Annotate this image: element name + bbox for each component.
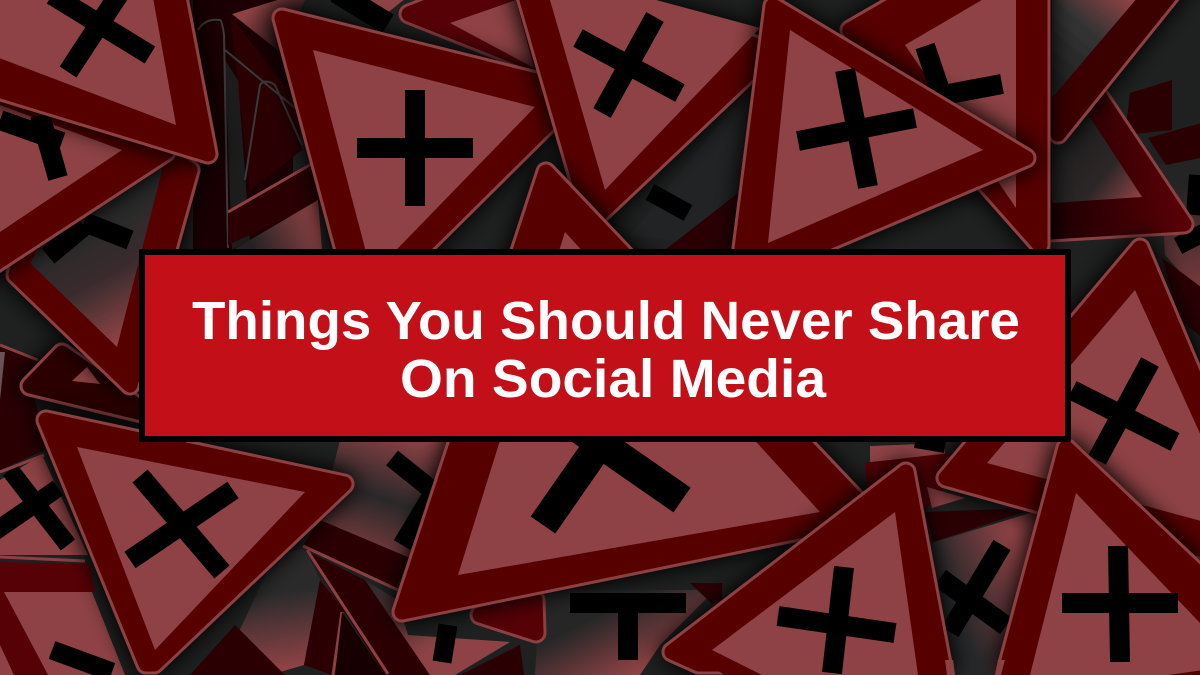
sign: diagonal band lower centre [305, 550, 524, 675]
sign: lower left corner [30, 353, 150, 415]
sign: bottom centre right grey with cross [925, 508, 1040, 675]
sign: top right down pointing [1040, 0, 1190, 134]
sign: bottom left lower with cross [0, 557, 125, 675]
sign: large top right with plus [738, 6, 1026, 280]
strip above bottom sign [865, 442, 965, 520]
sign: bottom centre back with cross [535, 583, 722, 675]
sign: centre apex behind banner and big lower sign [402, 172, 872, 612]
title banner [139, 249, 1071, 442]
far left dark sign [0, 345, 45, 472]
grey sign under third sign [630, 85, 750, 250]
title text: Things You Should Never Share [192, 291, 1020, 351]
sign: lower middle grey with cross [320, 440, 450, 560]
dark strip between top signs [193, 0, 302, 250]
sign: bottom left upper with cross [0, 455, 88, 555]
sign: top strip inner with cross [232, 0, 410, 52]
sign: right with cross behind big sign [850, 0, 1040, 245]
sign: triangle right behind band [1045, 15, 1184, 232]
sign: band behind second sign [228, 158, 330, 250]
sign: bottom centre right with plus [672, 472, 955, 675]
sign: far right grey with bars [1148, 122, 1200, 340]
sign: lower left grey with band [190, 548, 344, 675]
sign: top second with plus [282, 18, 580, 310]
sign: top left with cross [0, 0, 208, 154]
sign: top third with cross [517, 0, 772, 222]
sign: bottom left front with cross [46, 420, 344, 664]
sign: top middle small sign [409, 0, 540, 68]
sign: bottom right with plus [995, 448, 1200, 675]
sign: mid right with cross [946, 248, 1200, 570]
sign: left bottom pointing with cross [16, 90, 190, 385]
band below lower middle [303, 520, 410, 590]
sign: top right small dark sign [1125, 80, 1172, 135]
sign: small corner under big sign [480, 600, 536, 633]
sign: left upper with cross [0, 80, 166, 280]
title text: On Social Media [400, 349, 827, 409]
